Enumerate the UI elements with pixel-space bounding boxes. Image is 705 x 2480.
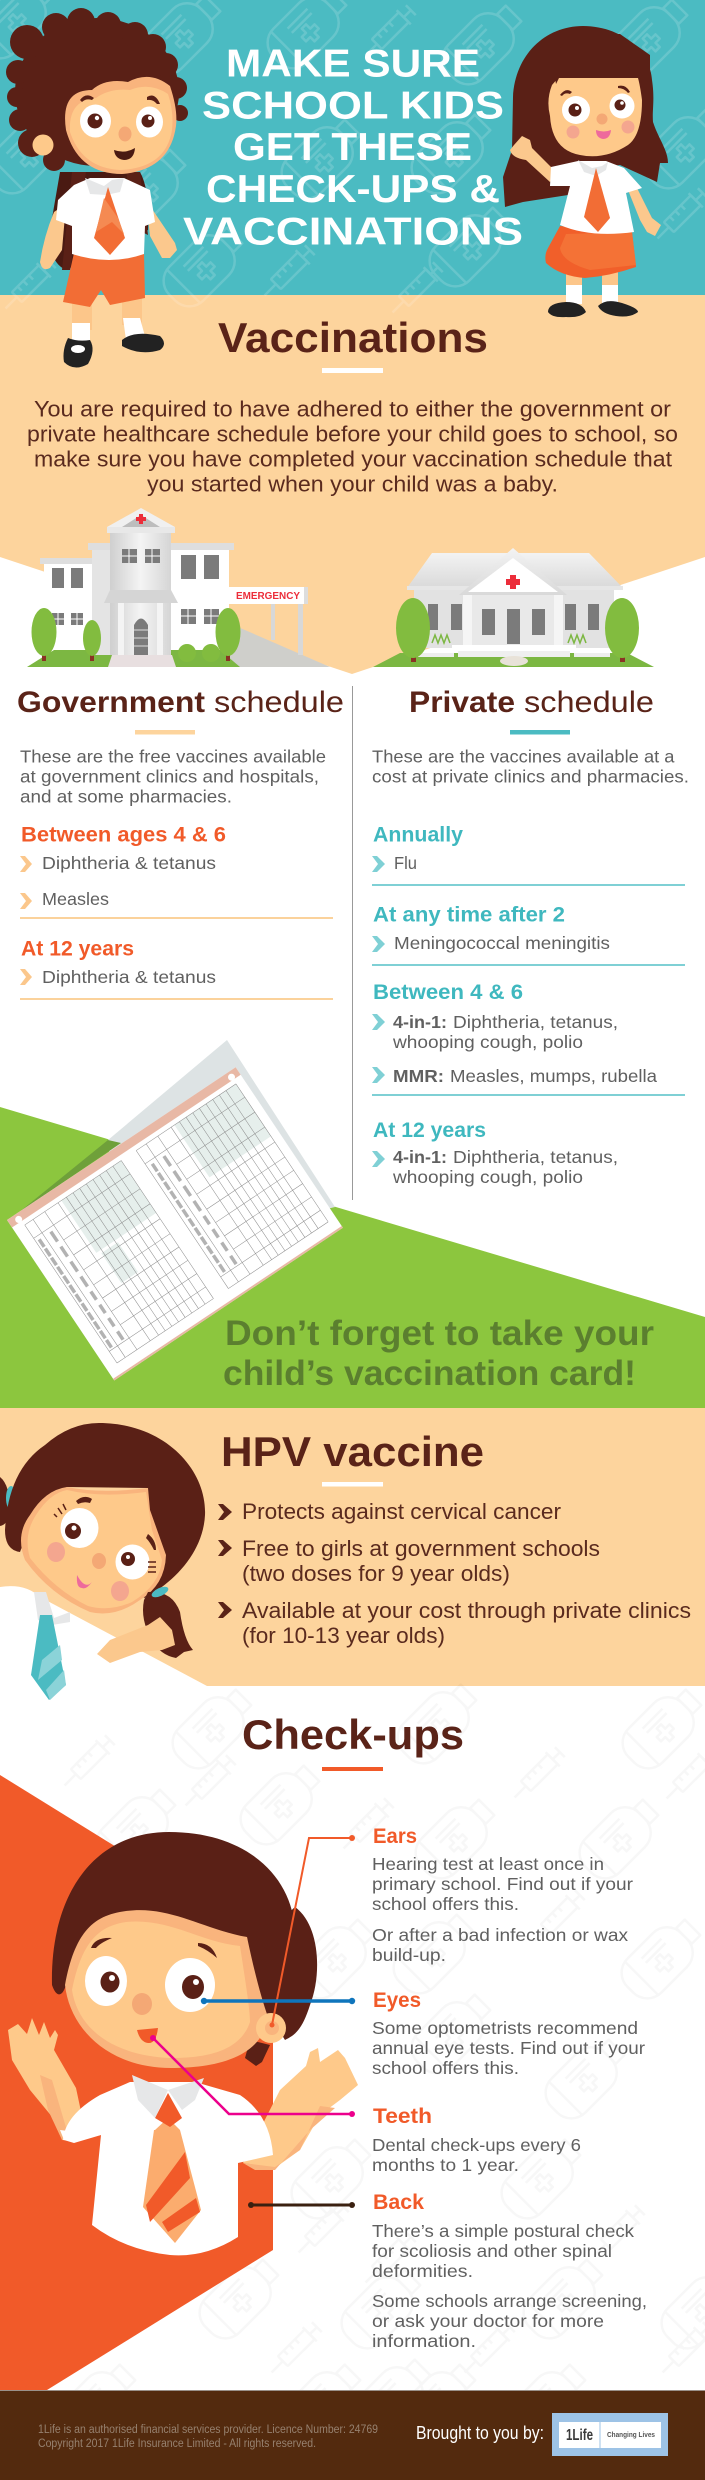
text block: teeth: Teeth (373, 2105, 432, 2128)
list: at 12 years private: whooping cough, polio (392, 1167, 583, 1187)
title: VACCINATIONS (183, 210, 523, 254)
text: private intro: These are the vaccines available at a (372, 746, 675, 766)
list: at 12 years private (372, 1119, 618, 1187)
heading: private schedule (409, 686, 654, 734)
text block: back: deformities. (372, 2261, 473, 2281)
text block: vaccinations intro (27, 396, 678, 496)
text block: eyes: annual eye tests. Find out if your (372, 2038, 645, 2058)
text block: ears (372, 1825, 633, 1965)
list: at 12 years (20, 938, 333, 1000)
list: HPV facts: Available at your cost through private clinics (242, 1598, 691, 1623)
illustration: government hospital (27, 508, 330, 667)
text block: vaccinations intro: You are required to have adhered to either the government or (34, 396, 671, 422)
arrow: eyes pointer (201, 1998, 355, 2004)
list: at 12 years: Diphtheria & tetanus (42, 967, 216, 987)
heading: Vaccinations: Vaccinations (218, 314, 488, 361)
list: at 12 years private: At 12 years (373, 1119, 486, 1142)
text block: ears: Ears (373, 1825, 417, 1848)
text block: eyes: Some optometrists recommend (372, 2018, 638, 2038)
arrow: back pointer (248, 2202, 355, 2208)
text block: back (372, 2191, 647, 2351)
list: HPV facts: (two doses for 9 year olds) (242, 1561, 510, 1586)
callout: take vaccination card: child’s vaccination card! (223, 1354, 636, 1393)
text block: back: Some schools arrange screening, (372, 2291, 647, 2311)
text block: back: Back (373, 2191, 424, 2214)
list: annually: Annually (373, 824, 463, 846)
list: between 4 and 6: whooping cough, polio (392, 1032, 583, 1052)
panel: footer (0, 2390, 705, 2480)
text: government intro: at government clinics and hospitals, (20, 766, 319, 786)
text block: eyes: school offers this. (372, 2058, 519, 2078)
text block: vaccinations intro: you started when your child was a baby. (147, 472, 558, 496)
panel: check-ups pattern (48, 1676, 705, 2452)
title: GET THESE (233, 126, 472, 169)
callout: take vaccination card (223, 1314, 654, 1393)
panel: HPV vaccine background (0, 1408, 705, 1686)
list: at 12 years: At 12 years (21, 938, 134, 960)
title: MAKE SURE (226, 42, 480, 86)
list: at any time after 2: Meningococcal meningitis (394, 933, 610, 953)
illustration: boy with backpack (6, 8, 188, 368)
text block: teeth (372, 2105, 581, 2175)
list: between 4 and 6 (372, 981, 685, 1096)
text: government intro (20, 746, 326, 806)
text: brought to you by: Brought to you by: (416, 2423, 544, 2443)
list: HPV facts (218, 1499, 691, 1648)
heading: private schedule: schedule (524, 686, 654, 719)
text block: back: information. (372, 2331, 476, 2351)
heading: Check-ups: Check-ups (242, 1711, 464, 1758)
text block: vaccinations intro: private healthcare schedule before your child goes to school, so (27, 422, 678, 446)
logo: 1Life: 1Life (566, 2427, 593, 2444)
list: HPV facts: Protects against cervical cancer (242, 1499, 561, 1524)
divider: column rule (352, 686, 353, 1200)
callout: take vaccination card: Don’t forget to take your (225, 1314, 654, 1353)
list: annually: Flu (394, 853, 417, 873)
list: HPV facts: (for 10-13 year olds) (242, 1623, 445, 1648)
text block: back: There’s a simple postural check (372, 2221, 634, 2241)
text block: ears: Or after a bad infection or wax (372, 1925, 628, 1945)
list: annually (372, 824, 685, 886)
panel: orange background (0, 1775, 273, 2390)
text block: ears: primary school. Find out if your (372, 1874, 633, 1894)
list: HPV facts: Free to girls at government schools (242, 1536, 600, 1561)
illustration: girl waving (503, 26, 668, 317)
logo: 1Life: Changing Lives (607, 2430, 655, 2439)
text: legal notice: 1Life is an authorised financial services provider. Licence Number: 24769 (38, 2424, 378, 2436)
title: CHECK-UPS & (206, 168, 500, 211)
illustration: private clinic (373, 548, 654, 667)
illustration: vaccination card (7, 1040, 343, 1380)
text: government intro: These are the free vaccines available (20, 746, 326, 766)
list: at any time after 2 (372, 904, 685, 966)
title (183, 42, 523, 254)
list: between ages 4 and 6 (20, 824, 333, 919)
text: legal notice (38, 2424, 378, 2450)
logo: 1Life (552, 2413, 668, 2456)
panel: header background (0, 0, 705, 674)
list: between ages 4 and 6: Measles (42, 889, 109, 909)
list: between 4 and 6: 4-in-1: (393, 1012, 447, 1032)
list: at 12 years private: Diphtheria, tetanus, (453, 1147, 618, 1167)
text: legal notice: Copyright 2017 1Life Insurance Limited - All rights reserved. (38, 2438, 316, 2450)
illustration: boy close-up (8, 1832, 358, 2255)
panel: government schedule (17, 686, 344, 1000)
text block: back: or ask your doctor for more (372, 2311, 604, 2331)
text block: vaccinations intro: make sure you have completed your vaccination schedule that (34, 446, 672, 472)
text block: eyes (372, 1989, 645, 2078)
panel: private schedule (372, 686, 689, 1187)
illustration: government hospital: EMERGENCY (236, 590, 300, 602)
text block: teeth: Dental check-ups every 6 (372, 2135, 581, 2155)
text block: teeth: months to 1 year. (372, 2155, 519, 2175)
list: between ages 4 and 6: Between ages 4 & 6 (21, 824, 226, 846)
panel: green vaccination card band (0, 1107, 705, 1408)
list: between 4 and 6: Between 4 & 6 (373, 981, 523, 1004)
pattern: header medical icons (0, 0, 705, 320)
arrow: ears pointer (270, 1835, 355, 2028)
list: at 12 years private: 4-in-1: (393, 1147, 447, 1167)
list: between 4 and 6: Measles, mumps, rubella (450, 1066, 657, 1086)
heading: private schedule: Private (409, 686, 515, 719)
text block: back: for scoliosis and other spinal (372, 2241, 612, 2261)
arrow: teeth pointer (150, 2035, 355, 2117)
illustration: HPV girl (0, 1423, 207, 1702)
text block: ears: Hearing test at least once in (372, 1854, 604, 1874)
heading: government schedule: schedule (214, 686, 344, 719)
text block: ears: school offers this. (372, 1894, 519, 1914)
text block: ears: build-up. (372, 1945, 446, 1965)
title: SCHOOL KIDS (202, 84, 504, 128)
heading: government schedule: Government (17, 686, 205, 719)
text: private intro (372, 746, 689, 786)
list: between ages 4 and 6: Diphtheria & tetanus (42, 853, 216, 873)
heading: HPV vaccine: HPV vaccine (221, 1428, 484, 1475)
heading: government schedule (17, 686, 344, 734)
text: government intro: and at some pharmacies. (20, 786, 232, 806)
text block: eyes: Eyes (373, 1989, 421, 2012)
list: between 4 and 6: MMR: (393, 1066, 444, 1086)
list: at any time after 2: At any time after 2 (373, 904, 565, 926)
list: between 4 and 6: Diphtheria, tetanus, (453, 1012, 618, 1032)
text: private intro: cost at private clinics and pharmacies. (372, 766, 689, 786)
